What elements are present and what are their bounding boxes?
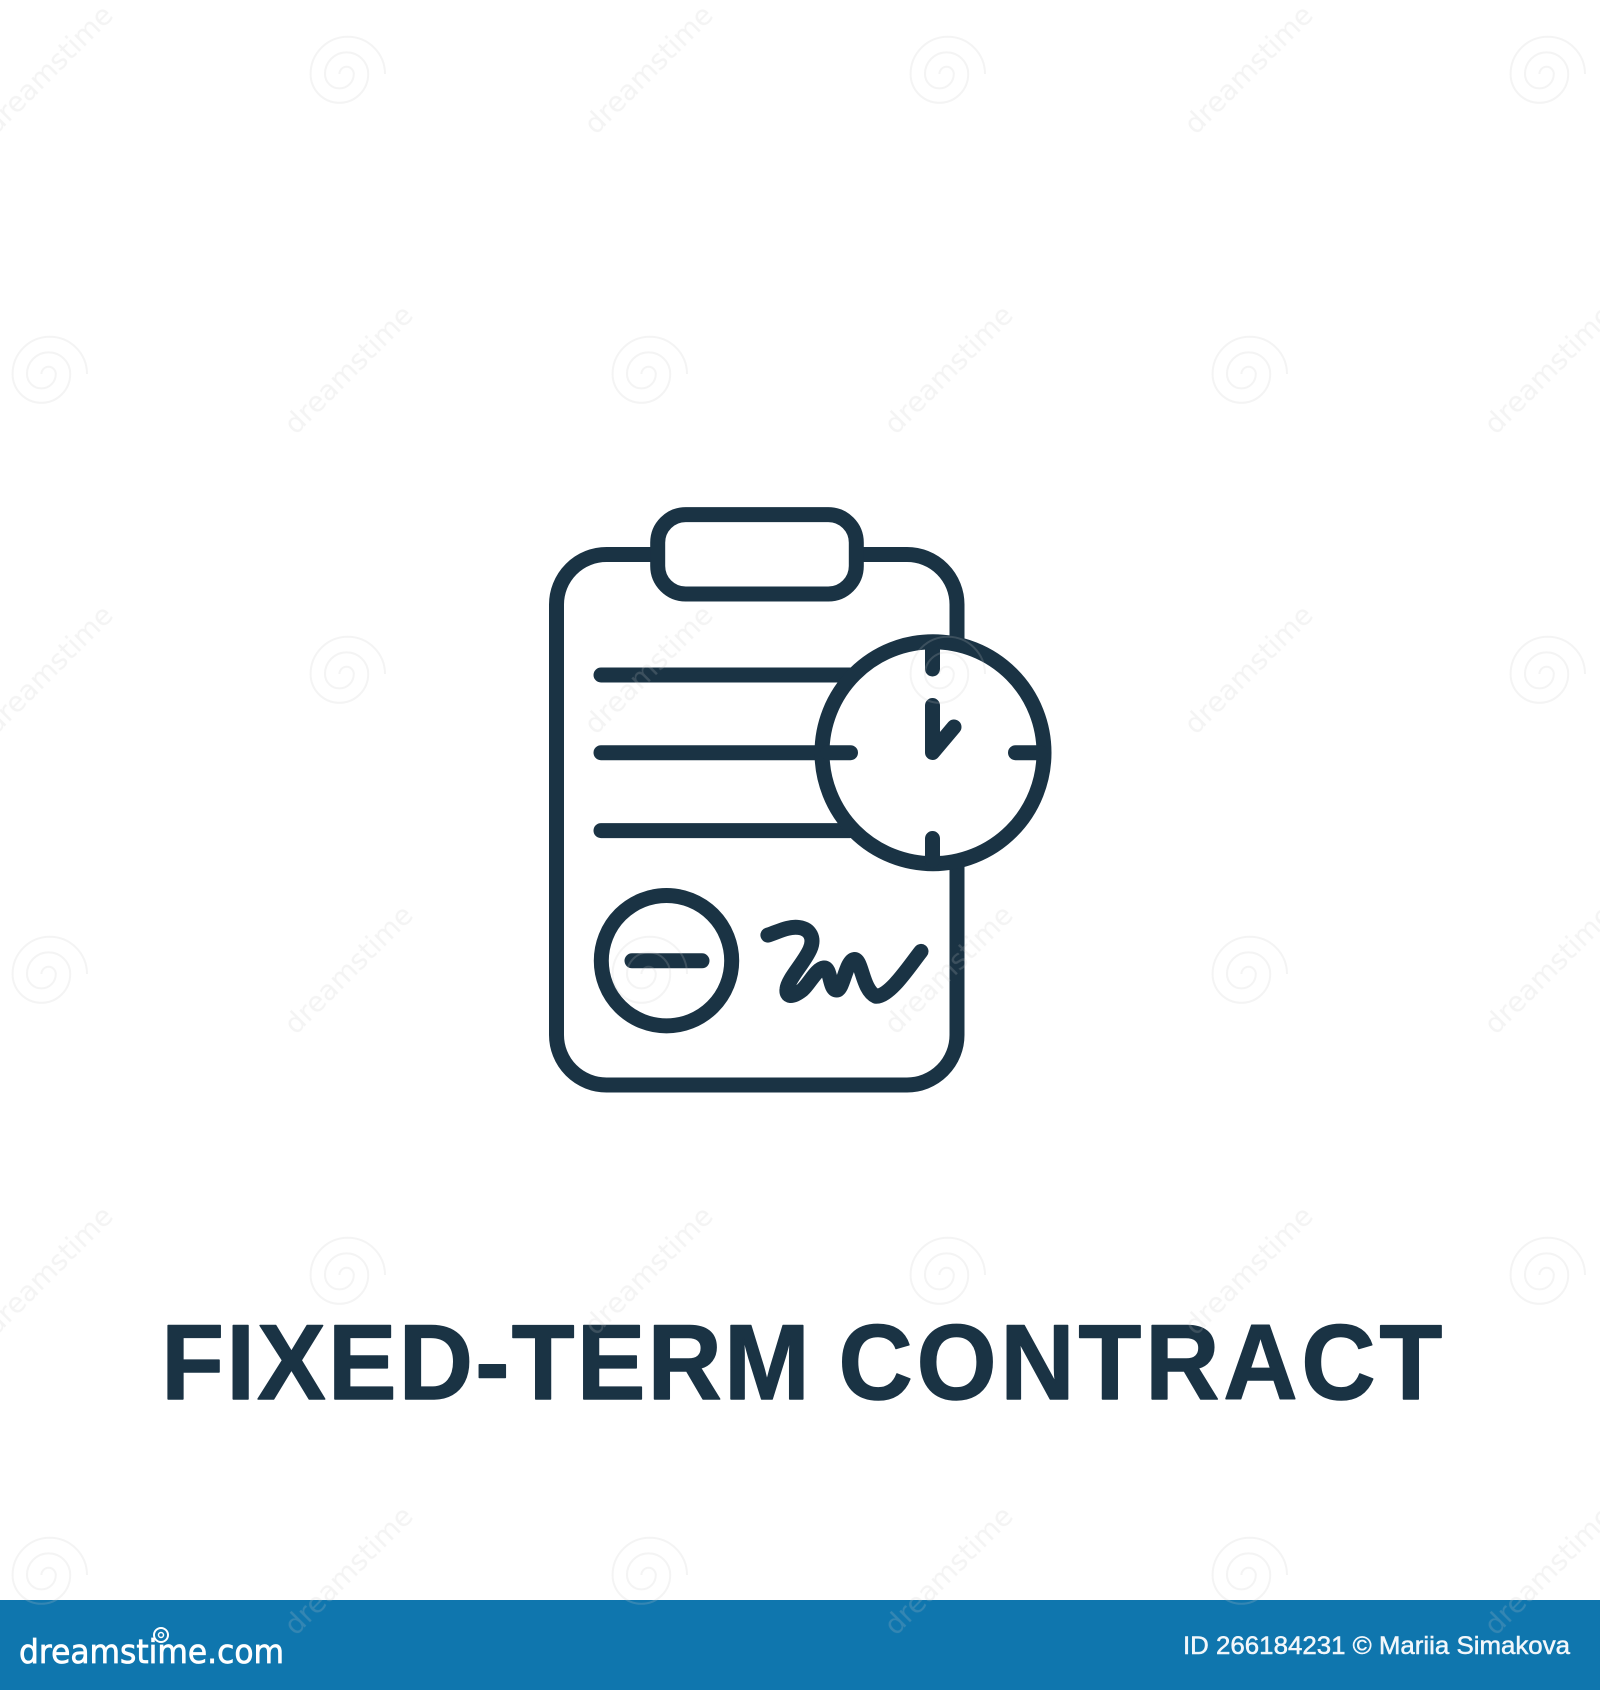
- footer credit: ID 266184231 © Mariia Simakova: [1183, 1632, 1570, 1660]
- footer logo: dreamstime.com: dreamstime.com: [19, 1632, 284, 1671]
- watermarks: dreamstime: [277, 1499, 419, 1641]
- icon: clock: [822, 642, 1044, 864]
- watermarks: dreamstime: [577, 1199, 719, 1341]
- watermarks: dreamstime: [1177, 0, 1319, 140]
- watermarks: dreamstime: [877, 1499, 1019, 1641]
- icon: fixed-term contract clipboard: [556, 515, 1044, 1085]
- watermarks: dreamstime: [577, 598, 719, 740]
- watermarks: dreamstime: [1177, 1199, 1319, 1341]
- icon: clipboard body: [556, 554, 957, 1085]
- icon: text lines: [601, 675, 850, 831]
- watermarks: dreamstime: [277, 898, 419, 1040]
- watermarks: dreamstime: [577, 0, 719, 140]
- watermarks: dreamstime: [877, 298, 1019, 440]
- title: CONTRACT: [838, 1303, 1446, 1422]
- icon: minus seal: [601, 896, 732, 1026]
- watermarks: dreamstime: [1177, 598, 1319, 740]
- footer band: [0, 1600, 1600, 1690]
- icon: signature: [768, 927, 921, 996]
- title: FIXED-TERM: [161, 1303, 812, 1422]
- watermarks: dreamstime: [277, 298, 419, 440]
- watermarks: dreamstime: [877, 898, 1019, 1040]
- icon: clipboard clip: [658, 515, 856, 594]
